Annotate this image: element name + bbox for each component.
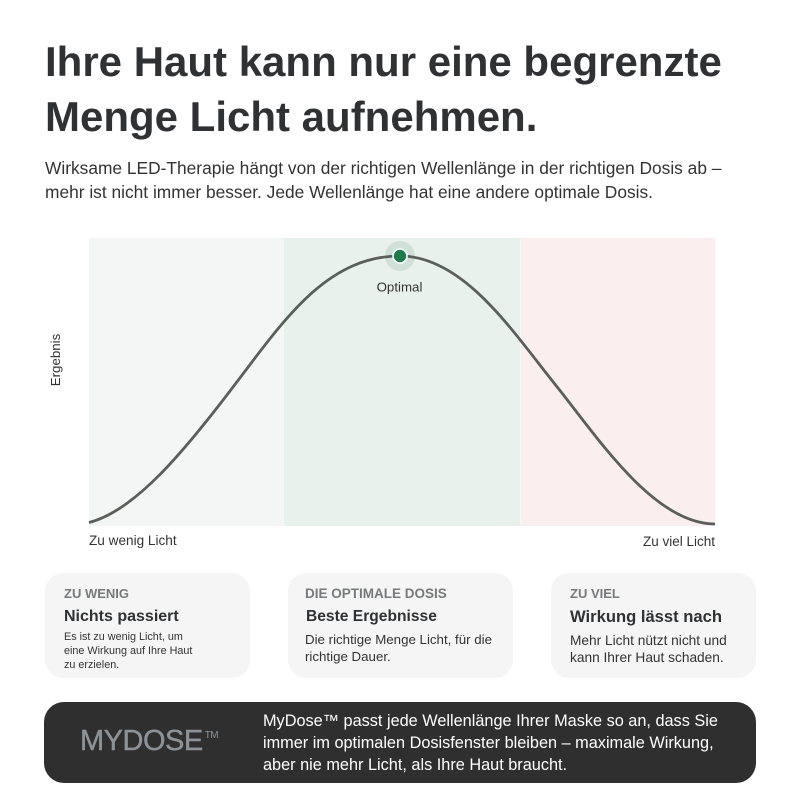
title: Ihre Haut kann nur eine begrenzte — [45, 38, 722, 85]
optimal marker — [393, 249, 407, 263]
title — [45, 38, 722, 140]
intro text — [45, 158, 722, 202]
response curve — [89, 256, 715, 524]
dose response chart — [48, 238, 716, 549]
card: optimal dose — [288, 573, 513, 678]
card label: ZU WENIG — [64, 586, 129, 601]
card label: DIE OPTIMALE DOSIS — [305, 586, 447, 601]
card body: Es ist zu wenig Licht, um — [64, 631, 183, 643]
x axis label: low: Zu wenig Licht — [89, 533, 177, 548]
zone: optimal — [284, 238, 520, 526]
card body: eine Wirkung auf Ihre Haut — [64, 645, 192, 657]
banner text: aber nie mehr Licht, als Ihre Haut braucht. — [263, 756, 567, 774]
y axis label: Ergebnis — [48, 333, 63, 386]
title: Menge Licht aufnehmen. — [45, 92, 537, 140]
card heading: Wirkung lässt nach — [570, 607, 722, 626]
logo: MyDose: MYDOSETM — [80, 725, 218, 757]
banner text — [263, 712, 718, 774]
card body: Mehr Licht nützt nicht und — [570, 633, 727, 648]
zone: too much — [521, 238, 716, 526]
zone: too little — [89, 238, 283, 526]
x axis label: high: Zu viel Licht — [643, 534, 715, 549]
banner text: immer im optimalen Dosisfenster bleiben – maximale Wirkung, — [263, 734, 714, 752]
MyDose banner — [44, 702, 756, 783]
intro text: Wirksame LED-Therapie hängt von der richtigen Wellenlänge in der richtigen Dosis ab – — [45, 158, 721, 178]
card body: zu erzielen. — [64, 659, 119, 671]
card heading: Beste Ergebnisse — [306, 608, 437, 624]
card: too much — [551, 573, 756, 678]
card label: ZU VIEL — [570, 586, 620, 601]
card body: kann Ihrer Haut schaden. — [570, 650, 724, 665]
card body — [570, 633, 727, 665]
intro text: mehr ist nicht immer besser. Jede Wellenlänge hat eine andere optimale Dosis. — [45, 182, 653, 202]
card body — [305, 632, 492, 664]
card body — [64, 631, 192, 671]
label: optimal: Optimal — [377, 280, 422, 294]
card body: Die richtige Menge Licht, für die — [305, 632, 492, 647]
card body: richtige Dauer. — [305, 649, 391, 664]
marker halo — [385, 241, 415, 271]
card: too little — [45, 573, 250, 678]
banner text: MyDose™ passt jede Wellenlänge Ihrer Maske so an, dass Sie — [263, 712, 718, 730]
card heading: Nichts passiert — [64, 608, 179, 625]
